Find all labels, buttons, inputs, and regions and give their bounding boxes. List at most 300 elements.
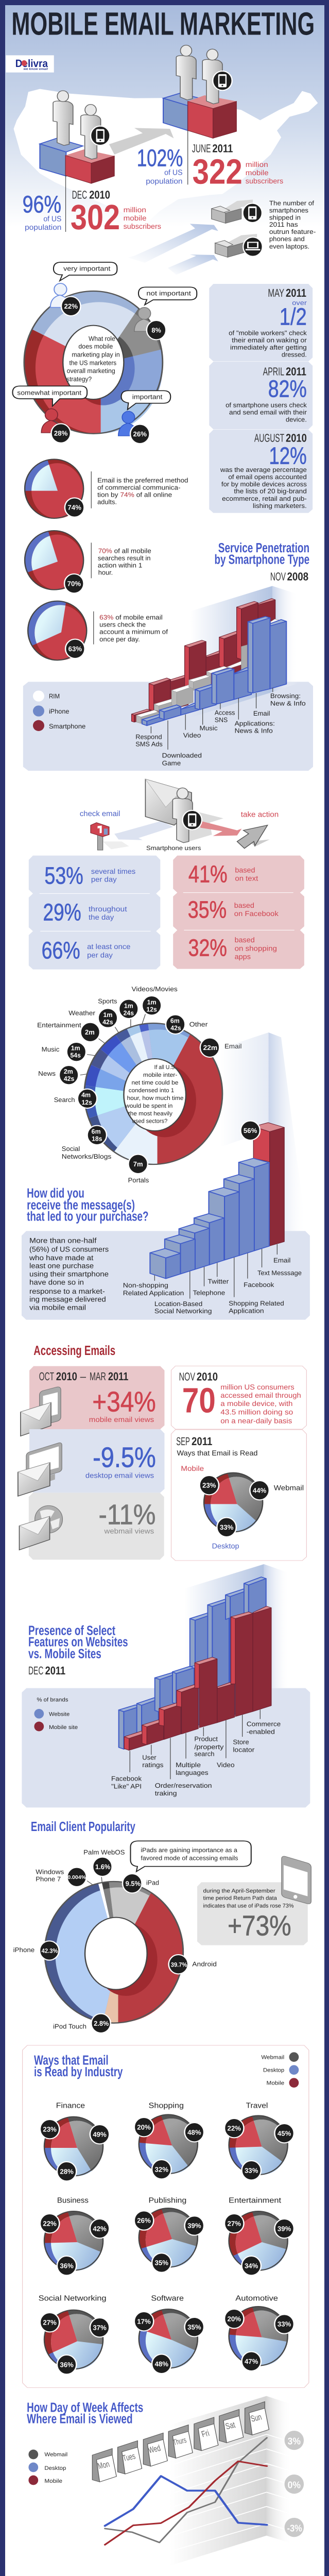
pie: Social Networking: 27%	[43, 2319, 57, 2326]
label: Social Networks/Blogs 6m18s: Networks/Blogs	[62, 1153, 111, 1160]
stat: 102% June 2011: 102%	[137, 144, 183, 172]
legend: website vs mobile: Website	[49, 1711, 70, 1717]
text block: smartphones shipped: The number of	[269, 199, 314, 207]
text block: 74% email preferred: Email is the preferred method	[97, 477, 188, 484]
top sky gradient	[5, 5, 324, 227]
axis labels: features: Product	[194, 1735, 218, 1742]
label: Social Networks/Blogs 6m18s	[62, 1126, 111, 1160]
axis badge: -3%: -3%	[287, 2522, 302, 2533]
label: Sports 1m24s: Sports	[98, 997, 117, 1005]
pie: Finance: 28%	[60, 2168, 74, 2175]
panel: take action stats: apps	[235, 953, 251, 961]
label: Other 6m42s: 42s	[170, 1025, 181, 1032]
axis labels: service penetration: Browsing:	[270, 692, 301, 700]
axis labels: purchase chart: Facebook	[244, 1281, 274, 1289]
panel: 70 million consumers: NOV	[179, 1370, 195, 1383]
user icon: important 26%: 26%	[133, 430, 147, 438]
text block: 56% of consumers: have done so in	[29, 1278, 84, 1286]
panel: 70 million consumers	[171, 1366, 306, 1429]
label: Videos/Movies 1m12s: Videos/Movies	[132, 986, 178, 993]
pie: Software: 35%	[187, 2324, 201, 2331]
panel: check email stats: 53%	[44, 862, 83, 889]
label: Videos/Movies 1m12s: 12s	[146, 1006, 157, 1013]
pie: Automotive: 47%	[245, 2358, 258, 2365]
icon: mailbox	[91, 823, 129, 850]
panel: ways that email is read: 44%	[253, 1487, 266, 1494]
callout: important: important	[132, 394, 163, 401]
center question text: hour, how much time	[127, 1095, 184, 1101]
callout: iPads gaining	[130, 1841, 251, 1872]
panel: take action stats: on Facebook	[234, 909, 279, 918]
panel: mobile email views: —	[80, 1370, 86, 1383]
axis labels: purchase chart: Twitter	[207, 1278, 229, 1285]
chart wall: day of week	[170, 2396, 291, 2566]
label: Palm WebOS 1.6%: Palm WebOS	[83, 1849, 125, 1856]
stat: 102% June 2011: 322	[193, 152, 243, 191]
section: preferred types and consumer frustration	[0, 2574, 318, 2576]
text block: smartphones shipped: 2011 has	[269, 221, 298, 228]
center question text: If all U.S.	[154, 1064, 176, 1071]
pie: Business: 42%	[93, 2225, 107, 2232]
pie: Business: Business	[57, 2196, 89, 2205]
panel: take action stats: based	[235, 866, 255, 874]
legend: industry	[261, 2052, 299, 2088]
label: Portals 7m: 7m	[133, 1160, 143, 1168]
center question text: condensed into 1	[129, 1087, 174, 1094]
axis labels: service penetration: SNS	[215, 717, 228, 724]
panel: May 2011 stat: of "mobile workers" check	[229, 330, 307, 337]
legend: website vs mobile	[34, 1697, 78, 1731]
axis labels: features	[111, 1709, 281, 1797]
axis labels: purchase chart: Shopping Related	[229, 1300, 284, 1307]
panel: iPads rose 73%: time period Return Path data	[203, 1895, 277, 1901]
label: Search 4m12s: 12s	[82, 1099, 92, 1106]
pie: Business: 36%	[60, 2262, 74, 2269]
pie: Automotive	[225, 2295, 293, 2370]
axis badge: 3%: 3%	[288, 2435, 301, 2446]
label: Music 1m54s: 54s	[71, 1052, 81, 1059]
section: day of week line chart	[27, 2396, 304, 2566]
axis labels: service penetration: Respond	[135, 734, 162, 741]
donut section: role of mobile marketing and stat panels	[12, 262, 313, 519]
pie: Automotive: 20%	[228, 2315, 241, 2323]
label: Social Networks/Blogs 6m18s: 18s	[92, 1136, 102, 1143]
stat: 102% June 2011: JUNE	[192, 142, 211, 155]
panel: May 2011 stat: MAY	[268, 286, 284, 299]
label: Palm WebOS 1.6%	[83, 1849, 125, 1876]
panel: 70 million consumers: 70	[182, 1381, 216, 1420]
panel: August 2010 stat: was the average percentage	[220, 466, 307, 473]
label: check email: check email	[80, 809, 120, 818]
pie: Automotive: 33%	[278, 2320, 291, 2328]
pie: Shopping: 48%	[187, 2129, 201, 2136]
axis labels: features: Commerce	[247, 1721, 281, 1728]
label: Windows Phone 7 0.004%: Windows	[36, 1868, 64, 1875]
text block: 56% of consumers: (56%) of US consumers	[29, 1245, 109, 1253]
center question text: marketing play in	[72, 351, 120, 359]
calendar: Mon	[92, 2449, 116, 2482]
pie: Software: 17%	[137, 2318, 151, 2325]
panel: take action stats: 41%	[188, 860, 228, 888]
axis labels: purchase chart: Non-shopping	[123, 1282, 168, 1289]
heading: by industry: is Read by Industry	[34, 2064, 123, 2079]
center question text: used sectors?	[132, 1117, 167, 1124]
callout: very important: very important	[63, 265, 111, 273]
label: Search 4m12s: 4m	[81, 1092, 91, 1099]
heading: presence of select features	[28, 1623, 128, 1677]
panel: August 2010 stat: AUGUST	[254, 431, 284, 444]
center question text: strategy?	[66, 376, 92, 383]
stat: 96% Dec 2010: DEC	[72, 188, 87, 201]
heading: how did you receive	[27, 1185, 149, 1224]
heading: presence of select features: Features on Websites	[28, 1634, 128, 1649]
stat: 102% June 2011	[137, 130, 283, 191]
panel: mobile email views: +34%	[92, 1386, 156, 1417]
panel: April 2011 stat: device.	[286, 416, 307, 423]
legend: service penetration: iPhone	[49, 708, 69, 715]
calendar: Wed	[143, 2433, 167, 2466]
legend: industry: Webmail	[261, 2054, 284, 2060]
bar chart: website vs mobile	[119, 1577, 271, 1750]
axis labels: purchase chart: Text Messsage	[257, 1269, 302, 1277]
section: check email and take action	[29, 779, 304, 970]
label: News 2m42s: News	[38, 1070, 56, 1077]
callout: important	[122, 391, 170, 410]
pie: Finance: 49%	[93, 2131, 107, 2138]
text block: 56% of consumers: via mobile email	[29, 1303, 86, 1312]
calendar: Thurs	[168, 2425, 193, 2458]
panel: August 2010 stat: of email opens accounted	[228, 473, 307, 481]
axis badge: 0%: 0%	[288, 2479, 301, 2490]
label: Windows Phone 7 0.004%	[36, 1868, 86, 1887]
axis labels: features: User	[142, 1754, 157, 1761]
heading: presence of select features: vs. Mobile Sites	[28, 1646, 101, 1661]
axis labels: service penetration: Game	[162, 760, 181, 767]
user icon: important 26%	[118, 411, 150, 444]
panel: May 2011 stat: their email on waking or	[232, 337, 307, 344]
bar chart: purchase messages	[150, 1123, 284, 1279]
legend: industry: Desktop	[263, 2067, 284, 2073]
stat: 96% Dec 2010: 96%	[23, 191, 61, 218]
pie: Entertainment: 34%	[245, 2262, 258, 2269]
pie: Shopping: 20%	[137, 2124, 151, 2131]
label: Android 39.7%	[169, 1955, 217, 1974]
stat: 96% Dec 2010: mobile	[124, 214, 146, 222]
panel: take action stats: based	[235, 936, 255, 944]
pie: Publishing: 39%	[187, 2222, 201, 2230]
panel: 70 million consumers: million US consumers	[220, 1383, 295, 1391]
panel: April 2011 stat: 82%	[268, 375, 307, 402]
text block: 63% check daily: account a minimum of	[99, 629, 168, 636]
text block: 63% check daily	[94, 612, 168, 645]
panel: August 2010 stat: ecommerce, retail and pub-	[222, 495, 307, 502]
callout: iPads gaining: favored mode of accessing emails	[141, 1855, 238, 1861]
heading: by industry: Ways that Email	[34, 2053, 109, 2067]
pie: Finance: 23%	[43, 2126, 57, 2133]
panel: take action stats: based	[234, 901, 254, 909]
axis labels: service penetration: Email	[253, 710, 270, 717]
axis labels: purchase chart: Telephone	[193, 1289, 225, 1296]
Delivra logo: Delivra	[15, 58, 48, 70]
panel: ways that email is read: 23%	[202, 1482, 216, 1489]
user icon: very important 22%: 22%	[64, 302, 78, 310]
stat: 102% June 2011: mobile	[246, 168, 269, 177]
pie: Publishing	[135, 2197, 203, 2272]
label: Windows Phone 7 0.004%: 0.004%	[67, 1874, 86, 1880]
pie: Travel	[225, 2102, 293, 2179]
panel: August 2010 stat: the lists of 20 big-brand	[234, 488, 307, 495]
badge: 56%	[240, 1121, 260, 1140]
label: Email 22m	[200, 1038, 241, 1057]
heading: service penetration: NOV	[270, 570, 286, 583]
stat: 96% Dec 2010	[23, 175, 161, 237]
panel: desktop email views: desktop email views	[85, 1471, 154, 1479]
center question text	[125, 1064, 184, 1124]
text block: 63% check daily: 63% of mobile email	[99, 614, 163, 621]
heading: day of week: Where Email is Viewed	[27, 2411, 133, 2426]
axis labels: purchase chart: Location-Based	[154, 1300, 202, 1308]
panel: ways email is read by industry	[22, 2045, 309, 2388]
legend: service penetration	[33, 690, 85, 731]
panel: August 2010 stat	[209, 430, 313, 513]
pie: Shopping	[135, 2102, 203, 2178]
legend: day of week: Desktop	[44, 2465, 66, 2471]
label: News 2m42s: 42s	[64, 1075, 74, 1082]
panel: check email stats: 29%	[43, 899, 81, 926]
label: iPad 9.5%: iPad	[146, 1879, 159, 1887]
line: mobile	[105, 2461, 267, 2545]
label: Videos/Movies 1m12s	[132, 986, 178, 1015]
axis labels: features: search	[194, 1750, 214, 1757]
chart wall	[185, 1564, 289, 1711]
text block: smartphones shipped: smartphones	[269, 207, 308, 214]
pie: Entertainment: 39%	[278, 2225, 291, 2232]
label: Sports 1m24s: 1m	[124, 1002, 133, 1009]
pie: Automotive: Automotive	[235, 2294, 278, 2302]
text block: smartphones shipped: phones and	[269, 235, 305, 243]
axis badge: 3%	[285, 2431, 304, 2450]
panel: check email stats: per day	[91, 875, 117, 884]
legend: service penetration: Smartphone	[49, 723, 85, 730]
panel: mobile email views: OCT	[39, 1370, 54, 1383]
panel: check email stats: the day	[89, 913, 114, 921]
bar chart: service penetration	[132, 599, 286, 725]
center question text: net time could be	[132, 1079, 178, 1086]
heading: service penetration	[214, 540, 309, 583]
line: webmail	[105, 2438, 267, 2543]
label: Videos/Movies 1m12s: 1m	[147, 999, 157, 1006]
section: email client popularity	[13, 1821, 311, 2032]
panel: check email stats: several times	[91, 867, 135, 875]
panel: May 2011 stat: dressed.	[282, 351, 307, 359]
label: smartphone users: Smartphone users	[146, 844, 201, 852]
Delivra logo	[6, 55, 54, 73]
stat: 102% June 2011: of US	[164, 168, 183, 177]
icon: cursor arrow	[237, 825, 270, 849]
label: Weather 1m42s	[68, 1008, 117, 1028]
axis badge: 0%	[285, 2475, 304, 2494]
center question text: the US marketers	[69, 360, 116, 367]
legend: website vs mobile: % of brands	[37, 1697, 68, 1703]
callout: very important	[54, 262, 117, 281]
text block: 56% of consumers: using their smartphone	[29, 1270, 109, 1278]
label: iPhone 42.3%: 42.3%	[42, 1947, 58, 1954]
legend: industry: Mobile	[267, 2080, 284, 2086]
calendar: Sun	[245, 2402, 269, 2435]
panel: check email stats: at least once	[87, 942, 130, 951]
heading: how did you receive: receive the message(s)	[27, 1197, 135, 1212]
panel: May 2011 stat: 1/2	[280, 303, 307, 330]
heading: service penetration: 2008	[287, 570, 308, 583]
pie chart: 63%	[27, 601, 88, 660]
pie chart: 74%	[24, 459, 84, 519]
panel: May 2011 stat: 2011	[286, 286, 306, 299]
chart wall	[190, 586, 298, 718]
arrow: to cursor	[200, 821, 241, 836]
text block: 56% of consumers: More than one-half	[29, 1236, 97, 1245]
label: Weather 1m42s: 42s	[102, 1019, 113, 1026]
label: iPhone 42.3%	[13, 1941, 59, 1960]
panel: August 2010 stat: lishing marketers.	[253, 502, 307, 510]
pie: Publishing: 26%	[137, 2217, 151, 2225]
label: Sports 1m24s: 24s	[124, 1009, 134, 1016]
panel: ways that email is read: 2011	[192, 1435, 212, 1448]
callout: not important	[138, 287, 197, 305]
panel: ways that email is read: Webmail	[274, 1484, 304, 1492]
panel: webmail views: webmail views	[104, 1527, 154, 1535]
label: Weather 1m42s: 1m	[103, 1011, 112, 1019]
panel: August 2010 stat: for by mobile devices across	[221, 481, 307, 488]
line: desktop	[105, 2476, 267, 2526]
calendar: Sat: Sat	[224, 2420, 236, 2431]
text block: smartphones shipped	[269, 199, 316, 250]
heading: how did you receive: that led to your purchase?	[27, 1209, 149, 1224]
label: Entertainment 2m: 2m	[85, 1028, 95, 1036]
text block: 70% searches	[91, 543, 151, 578]
label: Other 6m42s	[166, 1015, 208, 1034]
calendar: Sun: Sun	[249, 2412, 263, 2424]
chart: June 2011 blocks	[163, 45, 236, 138]
pie: Social Networking: 36%	[60, 2361, 74, 2368]
axis labels: features: -enabled	[247, 1728, 275, 1736]
center question text: does mobile	[78, 343, 113, 350]
stat: 102% June 2011: 2011	[212, 142, 233, 155]
panel: ways that email is read: Desktop	[212, 1542, 239, 1550]
panel: take action stats: 32%	[188, 934, 227, 961]
legend: day of week: Webmail	[44, 2451, 67, 2458]
label: Weather 1m42s: Weather	[68, 1010, 95, 1017]
stat: 102% June 2011: million	[246, 160, 268, 168]
pie chart: 70%: 70%	[67, 580, 81, 587]
text block: 56% of consumers: ing message delivered	[29, 1295, 106, 1303]
arrow: to mailbox	[114, 821, 173, 840]
text block: smartphones shipped: outrun feature-	[269, 228, 316, 235]
calendar: Tues	[118, 2441, 142, 2474]
callout: somewhat important	[12, 386, 87, 406]
text block: 56% of consumers: who have made at	[29, 1253, 93, 1262]
panel: check email stats: throughout	[89, 905, 127, 913]
panel: mobile email views: 2011	[108, 1370, 128, 1383]
panel: April 2011 stat: APRIL	[263, 365, 284, 378]
panel: webmail views: -11%	[99, 1499, 155, 1530]
panel: features base	[22, 1688, 310, 1807]
pie: Shopping: 32%	[155, 2166, 168, 2173]
label: Sports 1m24s	[98, 997, 138, 1019]
badge: 56%: 56%	[244, 1127, 257, 1134]
panel: April 2011 stat	[209, 362, 313, 429]
panel: iPads rose 73%: indicates that use of iPads rose 73%	[203, 1903, 293, 1909]
axis labels: service penetration: Music	[200, 725, 218, 732]
section: presence of select features	[22, 1564, 310, 1807]
callout: not important: not important	[146, 290, 191, 297]
legend: day of week: Mobile	[44, 2478, 62, 2484]
text block: 74% email preferred	[91, 471, 188, 509]
panel: ways that email is read: Ways that Email is Read	[177, 1449, 257, 1457]
label: Search 4m12s	[54, 1089, 97, 1108]
legend: service penetration: RIM	[49, 693, 60, 700]
user icon: somewhat important 28%: 28%	[54, 430, 67, 437]
pie: Business	[41, 2197, 109, 2275]
axis labels: features: Video	[217, 1761, 235, 1769]
panel: August 2010 stat: 2010	[286, 431, 307, 444]
axis labels: service penetration	[135, 688, 306, 767]
pie: Publishing: Publishing	[149, 2196, 186, 2205]
axis labels: purchase chart: Social Networking	[154, 1308, 212, 1315]
heading: how did you receive: How did you	[27, 1185, 84, 1200]
label: Search 4m12s: Search	[54, 1096, 75, 1104]
pie chart: 70%	[24, 530, 84, 592]
icon: smartphone user	[172, 788, 202, 843]
panel: ways that email is read: Mobile	[181, 1464, 204, 1472]
center question text: mobile inter-	[143, 1072, 177, 1078]
panel: 70 million consumers: accessed email through	[220, 1391, 301, 1399]
panel: May 2011 stat: immediately after getting	[230, 344, 307, 351]
axis labels: features: "Like" API	[111, 1783, 142, 1790]
stat: 102% June 2011: population	[146, 177, 183, 185]
text block: 56% of consumers	[29, 1236, 109, 1312]
axis labels: service penetration: Video	[183, 732, 201, 739]
text block: smartphones shipped: even laptops.	[269, 243, 309, 250]
label: Entertainment 2m	[37, 1022, 100, 1042]
panel: 70 million consumers: 43.5 million doing so	[220, 1408, 293, 1416]
section: 70% and 63% pies, service penetration	[23, 530, 313, 771]
panel: webmail views	[19, 1493, 164, 1560]
calendar: Sat	[219, 2410, 244, 2443]
axis labels: purchase chart: Related Application	[123, 1290, 184, 1297]
panel: 70 million consumers: 2010	[197, 1370, 218, 1383]
arrow: grey shadow right	[176, 812, 223, 841]
panel: May 2011 stat: over	[292, 299, 307, 307]
label: Email 22m: Email	[224, 1043, 241, 1050]
panel: April 2011 stat: 2011	[286, 365, 306, 378]
pie: Software: Software	[151, 2294, 184, 2302]
pie: Finance	[41, 2102, 109, 2180]
chart: Dec 2010 blocks	[40, 91, 114, 183]
axis labels: features: Order/reservation	[155, 1782, 212, 1789]
panel: check email stats: 66%	[42, 937, 80, 964]
arrow: light blue lower	[168, 255, 218, 275]
axis labels: features: Multiple	[176, 1761, 201, 1769]
label: Portals 7m	[128, 1155, 149, 1184]
pie: Social Networking	[39, 2295, 109, 2374]
stat: 96% Dec 2010: million	[124, 206, 146, 214]
pie: Travel: 22%	[228, 2125, 241, 2132]
panel: desktop email views: -9.5%	[93, 1442, 156, 1473]
pie chart: 63%: 63%	[68, 645, 82, 653]
callout: somewhat important: somewhat important	[17, 389, 81, 397]
axis labels: features: Facebook	[111, 1775, 142, 1783]
axis labels: service penetration: New & Info	[270, 700, 306, 707]
